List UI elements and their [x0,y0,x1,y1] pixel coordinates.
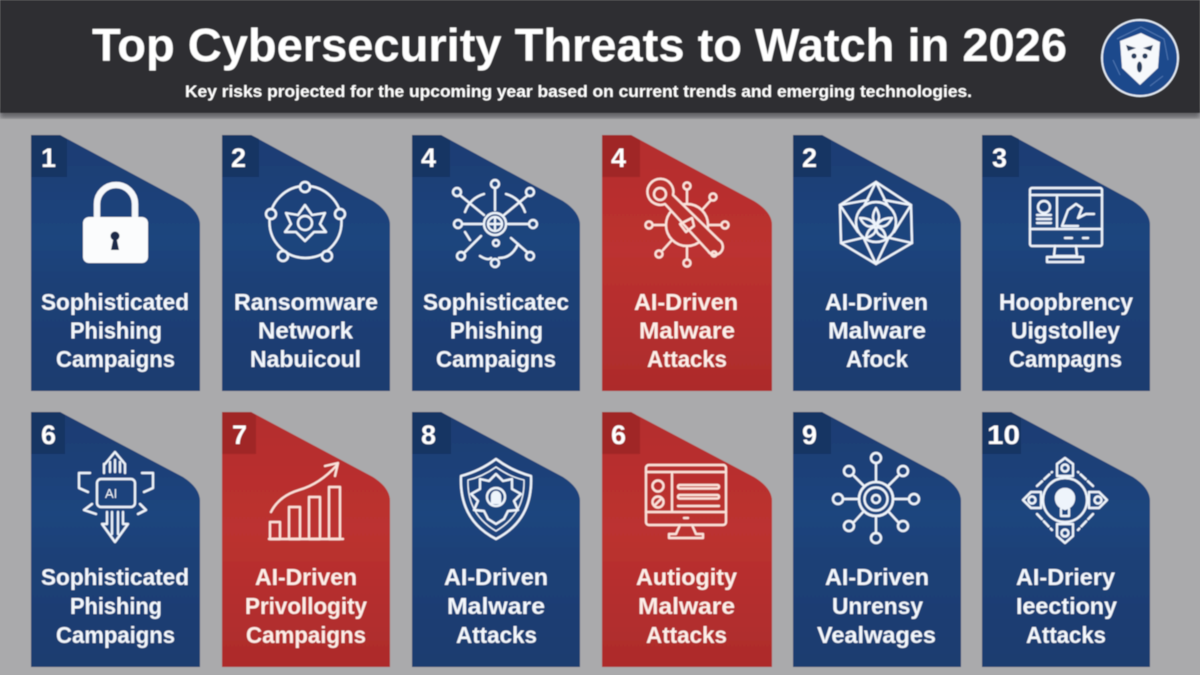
label: Campaigns [246,622,366,648]
label: Attacks [646,622,727,648]
label [423,289,569,372]
logo badge: wolf shield [1102,20,1178,96]
number badge: 1 [41,143,56,173]
number badge [412,135,450,177]
number badge: 8 [421,420,436,450]
card 12: AI-Driery Ieectiony Attacks [982,412,1150,667]
label [999,289,1133,372]
label [234,289,378,372]
label: Hoopbrency [999,289,1133,315]
label: AI-Driven [825,289,928,315]
number badge [412,412,451,454]
card 2: Ransomware Network [222,135,390,391]
label [636,564,737,648]
icon: hexagon flower [840,182,912,264]
icon: wrench virus [646,179,728,266]
icon: virus nodes [453,180,537,267]
label: Vealwages [817,622,936,648]
label [41,289,189,372]
label: Network [258,318,353,344]
icon: hub and nodes [833,453,919,543]
subtitle: Key risks projected for the upcoming year based on current trends and emerging technologies. [185,82,972,101]
card 4: AI-Driven Malware Attacks (red) [602,135,772,391]
number badge [602,412,640,454]
label: Sophisticated [41,564,189,590]
card 11: AI-Driven Unrensy Vealwages [793,412,961,667]
label [1016,564,1117,648]
card 3: Sophisticatec Phishing Campaigns [412,135,580,391]
label: Ransomware [234,289,378,315]
label: Campaigns [56,622,175,648]
label: Ieectiony [1016,593,1117,619]
label: Campaigns [436,346,556,372]
number badge: 2 [231,143,246,173]
card 7: Sophisticated Phishing Campaigns [31,412,200,667]
label: AI-Driven [825,564,929,590]
label: Phishing [450,318,543,344]
label: Afock [846,346,908,372]
label: Phishing [70,318,162,344]
label: AI-Driven [444,564,548,590]
label: Malware [638,593,735,619]
card 1: Sophisticated Phishing Campaigns [31,135,200,391]
icon: ring with locks and key [1023,458,1107,543]
label: AI-Driven [634,289,738,315]
icon: monitor with list [646,465,726,538]
number badge [602,135,640,177]
icon: rising bar chart [269,463,343,539]
card 9: AI-Driven Malware Attacks [412,412,580,667]
number badge [793,135,831,177]
number badge: 6 [611,420,626,450]
label [825,289,928,372]
icon: monitor [1030,188,1102,262]
number badge [31,412,65,454]
number badge [982,135,1019,177]
icon: AI chip arrows: AI [105,486,117,501]
number badge: 3 [992,143,1007,173]
number badge: 9 [802,420,817,450]
label: Campagns [1009,346,1122,372]
label: Sophisticated [41,289,189,315]
label: Sophisticatec [423,289,569,315]
number badge: 4 [611,143,626,173]
label [634,289,738,372]
header banner [0,0,1200,118]
number badge: 2 [802,143,817,173]
icon: shield gear [461,459,531,539]
number badge: 7 [232,420,247,450]
icon: padlock [83,185,148,263]
number badge [793,412,831,454]
label: Uigstolley [1011,318,1120,344]
label: Unrensy [832,593,923,619]
label: Malware [639,318,735,344]
number badge: 4 [421,143,436,173]
number badge: 10 [987,420,1020,450]
label: Malware [447,593,545,619]
card 10: Autiogity Malware Attacks (red) [602,412,772,667]
label: Malware [828,318,926,344]
title: Top Cybersecurity Threats to Watch in 2026 [92,19,1067,71]
label [444,564,548,648]
card 5: AI-Driven Malware Afock [793,135,961,391]
label [817,564,936,648]
icon: AI chip arrows [79,452,153,542]
label: Attacks [647,346,727,372]
label: Campaigns [56,346,175,372]
card 8: AI-Driven Privollogity Campaigns (red) [222,412,390,667]
number badge [222,412,256,454]
number badge [222,135,259,177]
label: Attacks [456,622,537,648]
label [41,564,189,648]
label: Nabuicoul [250,346,361,372]
number badge: 6 [41,420,56,450]
label: AI-Driven [255,564,357,590]
label: AI-Driery [1016,564,1115,590]
number badge [31,135,67,177]
label: Privollogity [245,593,367,619]
card 6: Hoopbrency Uigstolley Campagns [982,135,1150,391]
label: Attacks [1026,622,1106,648]
label: Phishing [70,593,162,619]
label: Autiogity [636,564,737,590]
label [245,564,367,648]
number badge [982,412,1021,454]
icon: ring network [266,182,345,261]
